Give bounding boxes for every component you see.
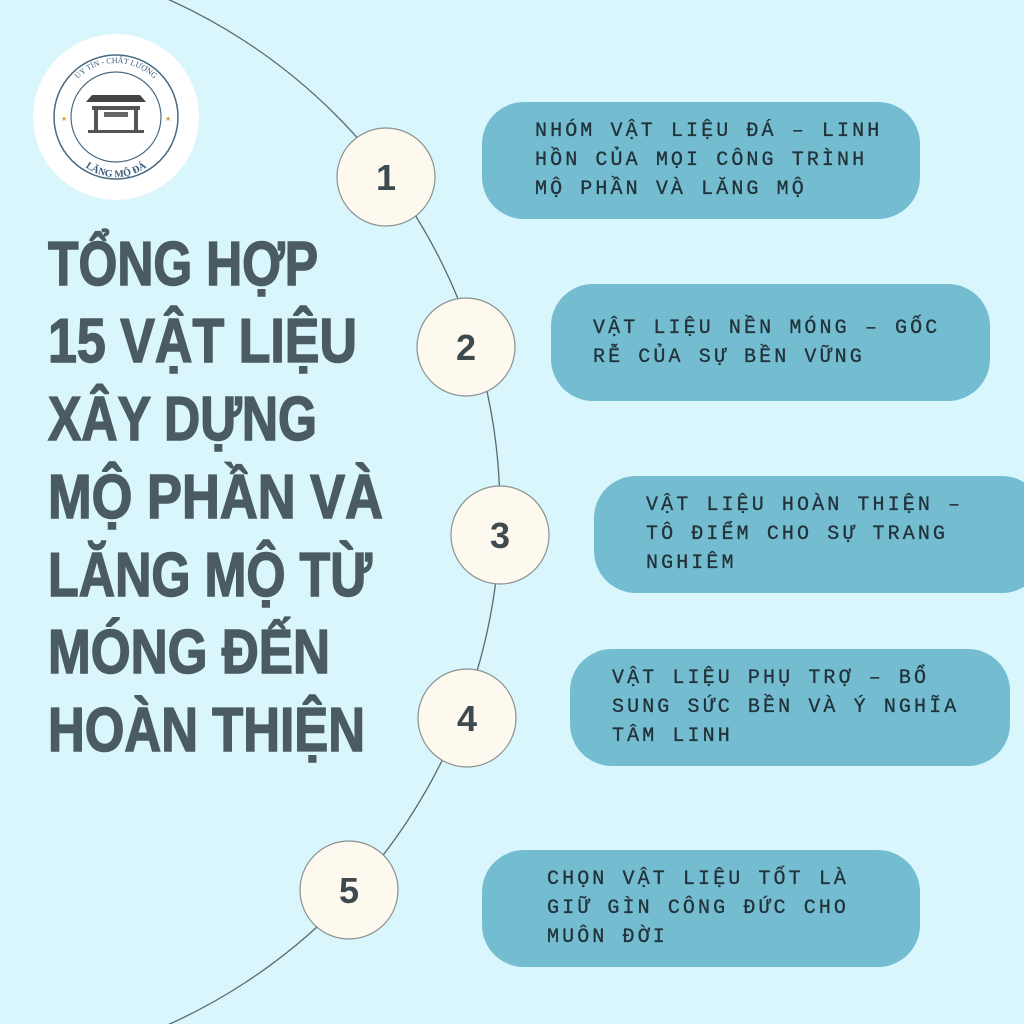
box 4: TÂM LINH bbox=[612, 725, 733, 748]
circle 3: 3 bbox=[490, 515, 510, 556]
box 1: HỒN CỦA MỌI CÔNG TRÌNH bbox=[535, 149, 867, 172]
title: TỔNG HỢP bbox=[48, 229, 318, 299]
box 4: SUNG SỨC BỀN VÀ Ý NGHĨA bbox=[612, 696, 959, 719]
box 5: GIỮ GÌN CÔNG ĐỨC CHO bbox=[547, 897, 849, 920]
box 5: CHỌN VẬT LIỆU TỐT LÀ bbox=[547, 868, 849, 891]
box 5: MUÔN ĐỜI bbox=[547, 926, 668, 949]
circle 1: 1 bbox=[376, 157, 396, 198]
circle 4: 4 bbox=[457, 698, 477, 739]
logo: ★ bbox=[61, 115, 67, 123]
title bbox=[47, 228, 383, 765]
logo: LĂNG MỘ ĐÁ bbox=[85, 160, 147, 178]
box 1: NHÓM VẬT LIỆU ĐÁ – LINH bbox=[535, 120, 882, 143]
circle 1 bbox=[337, 128, 435, 226]
box 1: MỘ PHẦN VÀ LĂNG MỘ bbox=[535, 178, 807, 201]
box 4 bbox=[570, 649, 1010, 766]
box 3: TÔ ĐIỂM CHO SỰ TRANG bbox=[646, 523, 948, 546]
title: 15 VẬT LIỆU bbox=[48, 307, 357, 376]
logo: ★ bbox=[165, 115, 171, 123]
logo: UY TÍN - CHẤT LƯỢNG bbox=[74, 56, 158, 78]
circle 2: 2 bbox=[456, 327, 476, 368]
circle 5: 5 bbox=[339, 870, 359, 911]
circle 2 bbox=[417, 298, 515, 396]
box 2: VẬT LIỆU NỀN MÓNG – GỐC bbox=[593, 316, 940, 340]
logo bbox=[33, 34, 199, 200]
box 4: VẬT LIỆU PHỤ TRỢ – BỔ bbox=[612, 667, 929, 690]
box 1 bbox=[482, 102, 920, 219]
circle 5 bbox=[300, 841, 398, 939]
circle 4 bbox=[418, 669, 516, 767]
box 3 bbox=[594, 476, 1024, 593]
box 5 bbox=[482, 850, 920, 967]
box 3: VẬT LIỆU HOÀN THIỆN – bbox=[646, 494, 963, 517]
box 2: RỄ CỦA SỰ BỀN VỮNG bbox=[593, 346, 865, 368]
box 2 bbox=[551, 284, 990, 401]
circle 3 bbox=[451, 486, 549, 584]
box 3: NGHIÊM bbox=[646, 552, 737, 575]
title: MÓNG ĐẾN bbox=[48, 618, 330, 687]
title: XÂY DỰNG bbox=[48, 385, 317, 454]
